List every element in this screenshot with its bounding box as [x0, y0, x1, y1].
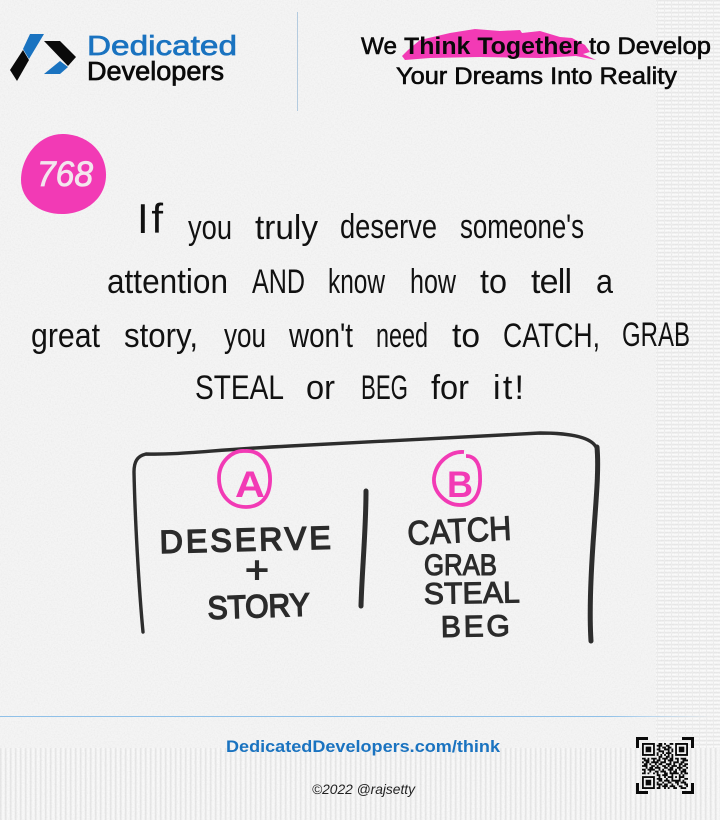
brush highlight: [402, 29, 596, 60]
footer rule: [0, 716, 712, 717]
main quote: [31, 195, 690, 407]
main quote: a: [596, 263, 613, 301]
main quote: won't: [288, 317, 353, 355]
deserve plus story: DESERVE: [159, 520, 331, 560]
QR corner brackets: [638, 738, 692, 792]
website link: DedicatedDevelopers.com/think: [226, 737, 501, 756]
QR modules: [642, 744, 688, 788]
circled B: B: [447, 464, 473, 505]
logo wordmark: [87, 30, 237, 86]
tagline: We: [361, 33, 397, 60]
main quote: someone's: [460, 208, 584, 246]
column A: [159, 451, 331, 626]
main quote: attention: [107, 263, 228, 301]
main quote: AND: [252, 263, 305, 301]
main quote: to: [480, 263, 507, 301]
logo wordmark: Developers: [87, 58, 224, 86]
catch grab steal beg: BEG: [441, 610, 510, 644]
hand-drawn comparison box: [134, 433, 598, 641]
main quote: tell: [531, 263, 572, 301]
tagline: [361, 29, 711, 90]
column B: [406, 452, 520, 644]
tagline: Your Dreams Into Reality: [396, 63, 677, 90]
main quote: you: [224, 317, 266, 355]
QR code: [638, 738, 692, 792]
header divider: [297, 12, 298, 111]
main quote: you: [188, 209, 232, 247]
main quote: STEAL: [195, 369, 284, 407]
catch grab steal beg: [406, 510, 520, 644]
main quote: great: [31, 317, 100, 355]
main quote: it!: [493, 369, 524, 407]
number badge: [21, 134, 106, 214]
main quote: CATCH,: [503, 317, 600, 355]
catch grab steal beg: STEAL: [424, 576, 520, 611]
main quote: for: [431, 369, 469, 407]
main quote: to: [452, 317, 480, 355]
main quote: need: [376, 317, 428, 355]
main quote: GRAB: [622, 316, 690, 354]
catch grab steal beg: GRAB: [424, 549, 497, 582]
box outline right: [590, 447, 598, 641]
logo mark: [10, 34, 76, 81]
catch grab steal beg: CATCH: [406, 510, 512, 553]
main quote: or: [306, 369, 335, 407]
circled A: [219, 451, 270, 507]
circled A: A: [235, 464, 265, 505]
main quote: BEG: [361, 369, 408, 407]
main quote: truly: [255, 209, 318, 247]
deserve plus story: STORY: [207, 586, 310, 626]
main quote: story,: [124, 317, 198, 355]
box outline left and top: [134, 433, 596, 632]
tagline: Think Together: [404, 33, 582, 60]
deserve plus story: +: [245, 550, 269, 592]
tagline: to Develop: [589, 33, 711, 60]
deserve plus story: [159, 520, 331, 626]
main quote: know: [328, 263, 385, 301]
main quote: deserve: [340, 208, 437, 246]
circled B: [434, 452, 480, 505]
centre divider: [361, 491, 366, 606]
copyright: ©2022 @rajsetty: [312, 781, 416, 797]
logo wordmark: Dedicated: [87, 30, 237, 61]
logo: [10, 30, 237, 86]
number badge: 768: [37, 155, 94, 194]
main quote: how: [410, 263, 456, 301]
main quote: If: [137, 195, 163, 242]
